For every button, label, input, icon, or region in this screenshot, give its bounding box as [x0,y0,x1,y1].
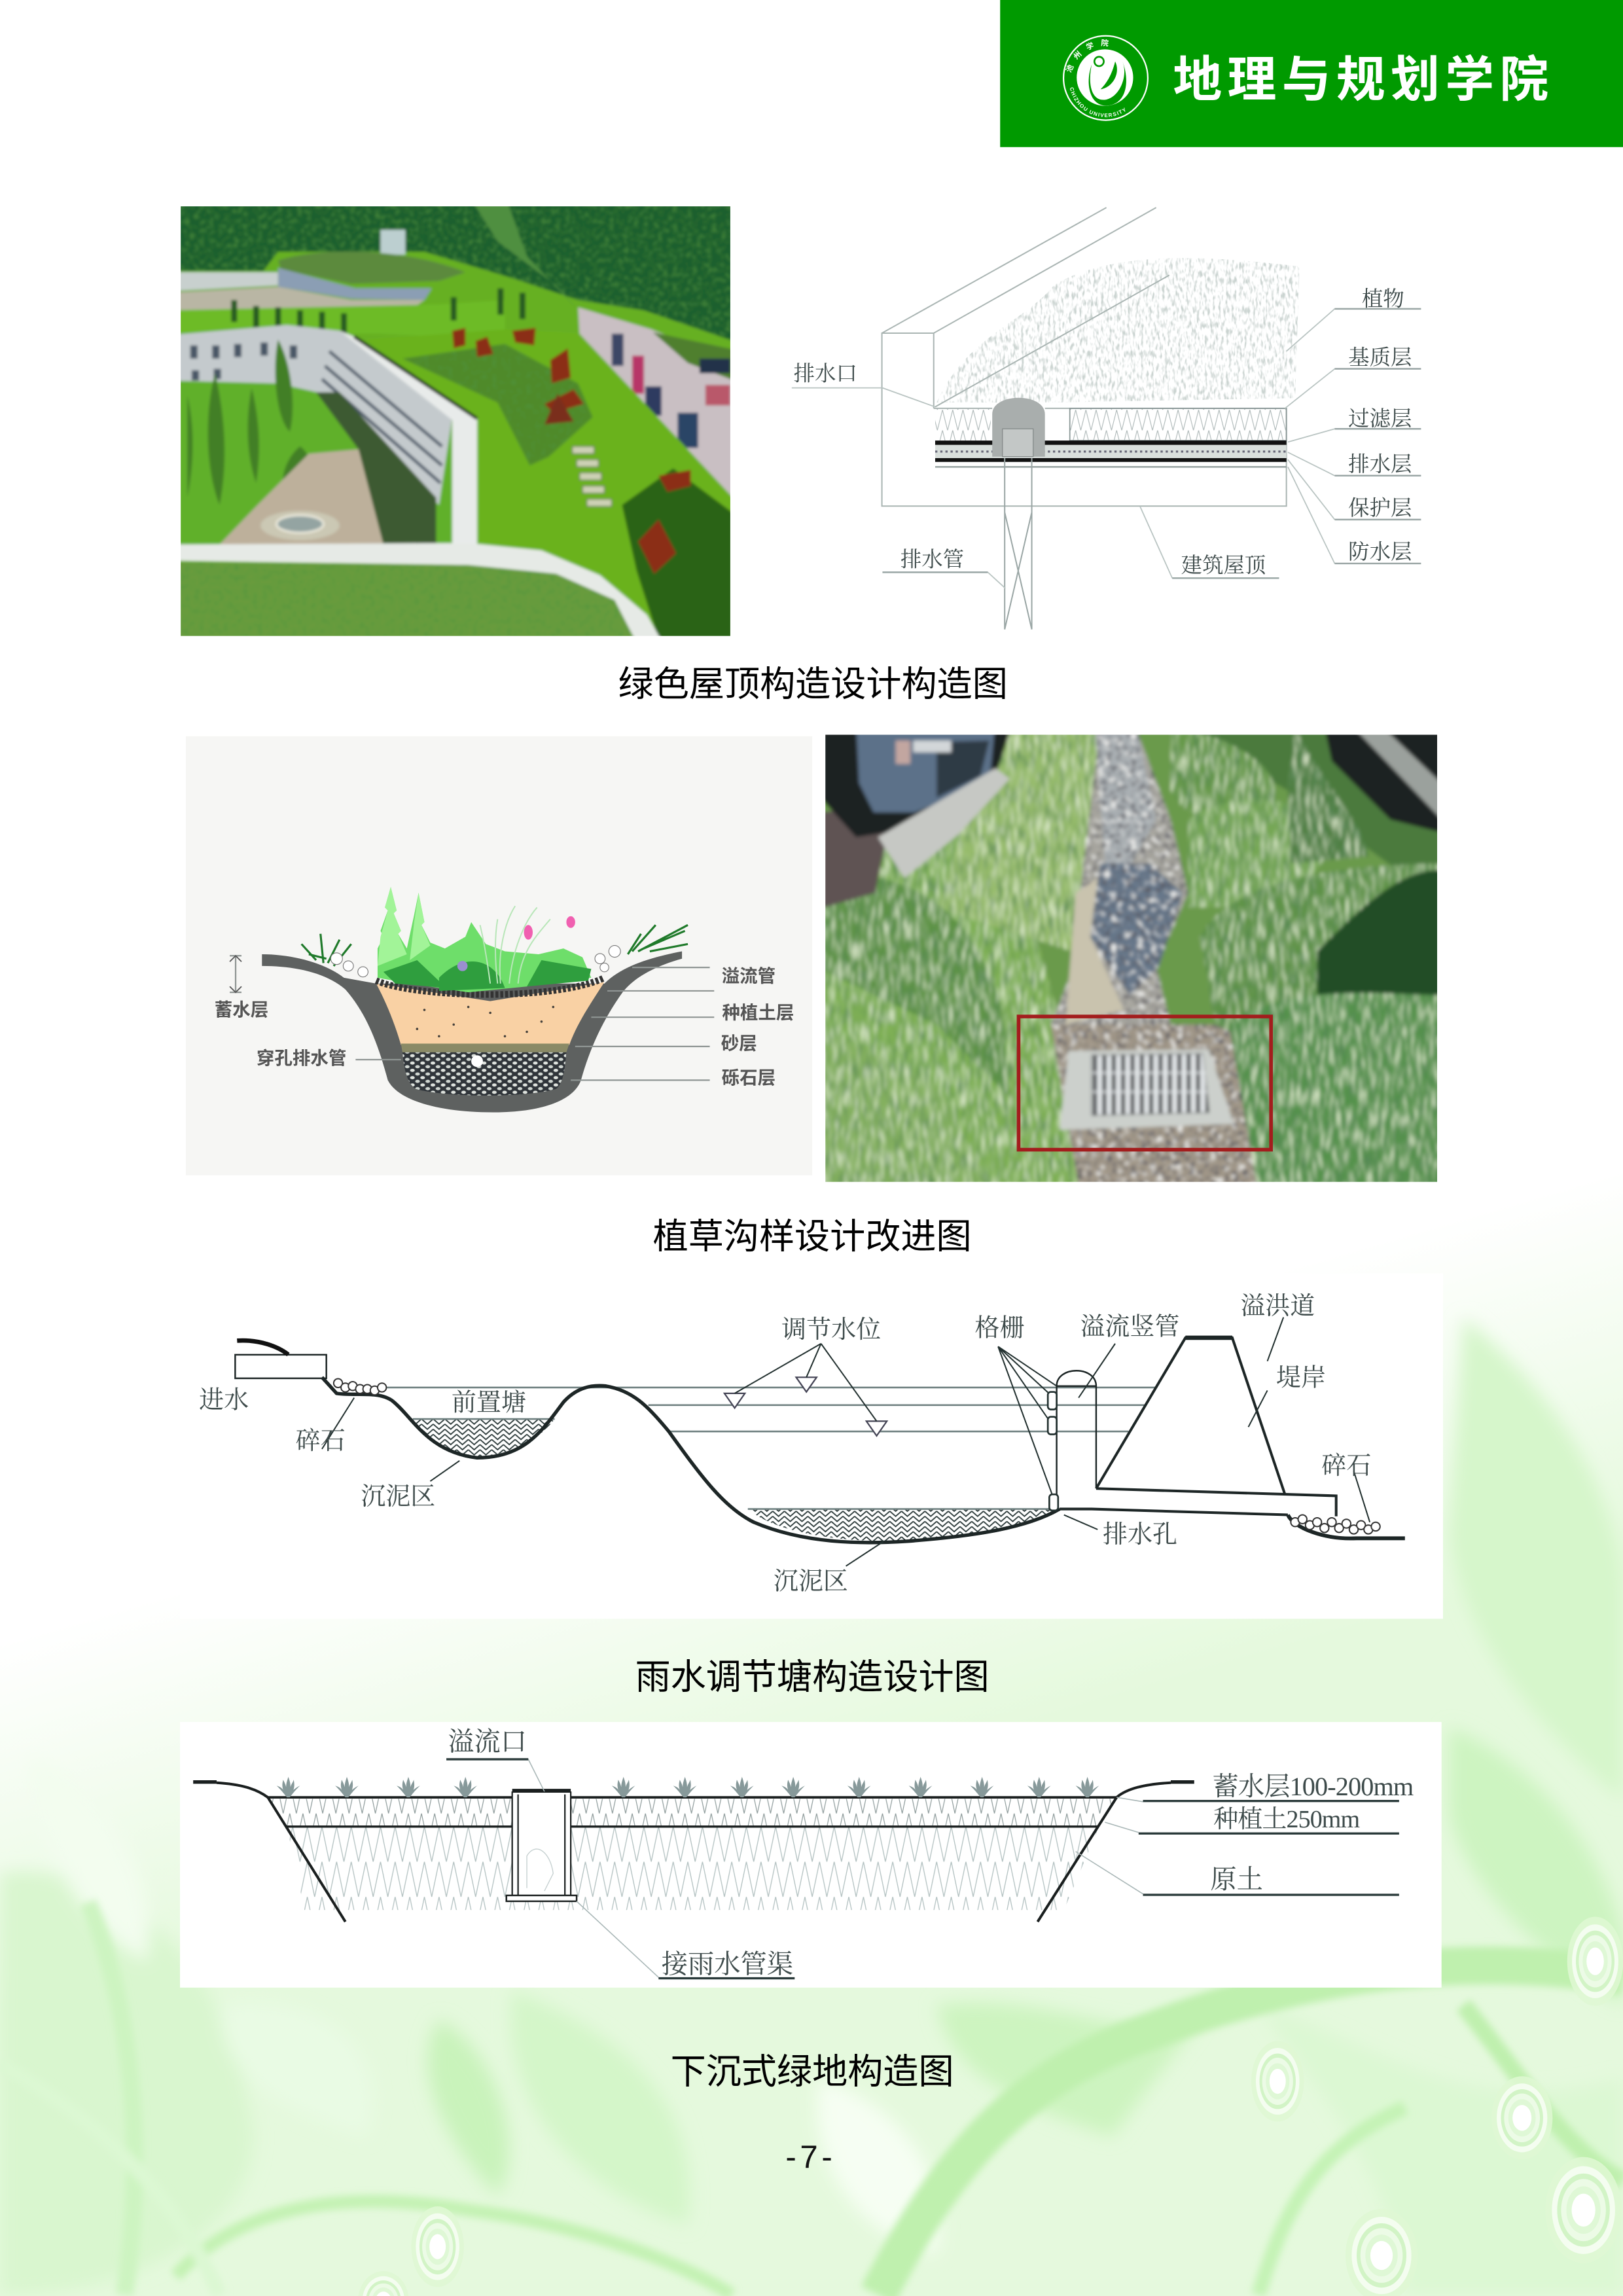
caption: grass swale: 植草沟样设计改进图 [653,1217,972,1257]
page number: -7- [785,2139,836,2175]
diagram: bioretention swale section: 穿孔排水管 [257,1048,346,1068]
diagram: green roof construction section: 建筑屋顶 [1181,553,1266,577]
diagram: bioretention swale section [186,736,812,1175]
diagram: green roof construction section [792,207,1421,630]
sediment hatching [413,1419,1060,1541]
diagram: stormwater detention pond section: 进水 [199,1386,249,1414]
plants [936,258,1300,403]
plants row [277,1777,1099,1797]
diagram: stormwater detention pond section: 碎石 [1321,1452,1371,1480]
diagram: bioretention swale section: 砾石层 [722,1067,776,1088]
diagram: sunken green space section: 接雨水管渠 [662,1949,793,1979]
diagram: green roof construction section: 排水口 [794,361,857,386]
diagram: stormwater detention pond section: 碎石 [296,1427,346,1455]
diagram: green roof construction section: 过滤层 [1348,407,1412,431]
gravel [334,1379,1380,1534]
icon: Chizhou University logo: CHIZHOU UNIVERSITY [1070,88,1126,117]
diagram: bioretention swale section: 种植土层 [722,1002,794,1022]
caption: sunken green space: 下沉式绿地构造图 [671,2052,954,2091]
soil hatching [268,1799,1116,1910]
diagram: stormwater detention pond section: 沉泥区 [361,1483,435,1511]
diagram: stormwater detention pond section: 调节水位 [781,1316,881,1344]
diagram: stormwater detention pond section: 溢洪道 [1240,1293,1315,1320]
diagram: stormwater detention pond section [180,1274,1443,1619]
diagram: stormwater detention pond section: 堤岸 [1276,1365,1326,1392]
diagram: stormwater detention pond section: 格栅 [974,1315,1024,1342]
diagram: sunken green space section [180,1722,1442,1988]
diagram: bioretention swale section: 砂层 [721,1033,757,1053]
diagram: sunken green space section: 溢流口 [448,1727,527,1757]
diagram: stormwater detention pond section: 溢流竖管 [1080,1313,1179,1340]
diagram: green roof construction section: 排水管 [901,547,964,571]
caption: green roof: 绿色屋顶构造设计构造图 [618,664,1008,704]
photo: grass swale with drain grate [813,723,1449,1194]
diagram: green roof construction section: 防水层 [1348,540,1412,564]
icon: Chizhou University logo: 池州学院 [1065,39,1109,73]
header banner [1000,0,1623,147]
plants [302,887,688,992]
diagram: green roof construction section: 植物 [1362,287,1404,311]
diagram: stormwater detention pond section: 沉泥区 [774,1568,848,1596]
diagram: green roof construction section: 保护层 [1348,496,1412,520]
diagram: green roof construction section: 基质层 [1348,346,1412,370]
diagram: sunken green space section: 种植土250mm [1213,1806,1359,1833]
title: school name: 地理与规划学院 [1173,52,1554,107]
soil profile [262,952,682,1113]
water level markers [724,1377,887,1436]
photo: green roof building [168,194,742,649]
diagram: stormwater detention pond section: 前置塘 [452,1390,526,1417]
caption: detention pond: 雨水调节塘构造设计图 [635,1658,990,1697]
diagram: sunken green space section: 原土 [1210,1865,1263,1894]
diagram: green roof construction section: 排水层 [1348,452,1412,476]
diagram: stormwater detention pond section: 排水孔 [1103,1521,1177,1549]
diagram: bioretention swale section: 蓄水层 [215,999,268,1020]
diagram: bioretention swale section: 溢流管 [722,966,776,986]
icon: Chizhou University logo [1063,35,1149,121]
diagram: sunken green space section: 蓄水层100-200mm [1213,1772,1414,1801]
grates and leaders [322,1318,1370,1566]
